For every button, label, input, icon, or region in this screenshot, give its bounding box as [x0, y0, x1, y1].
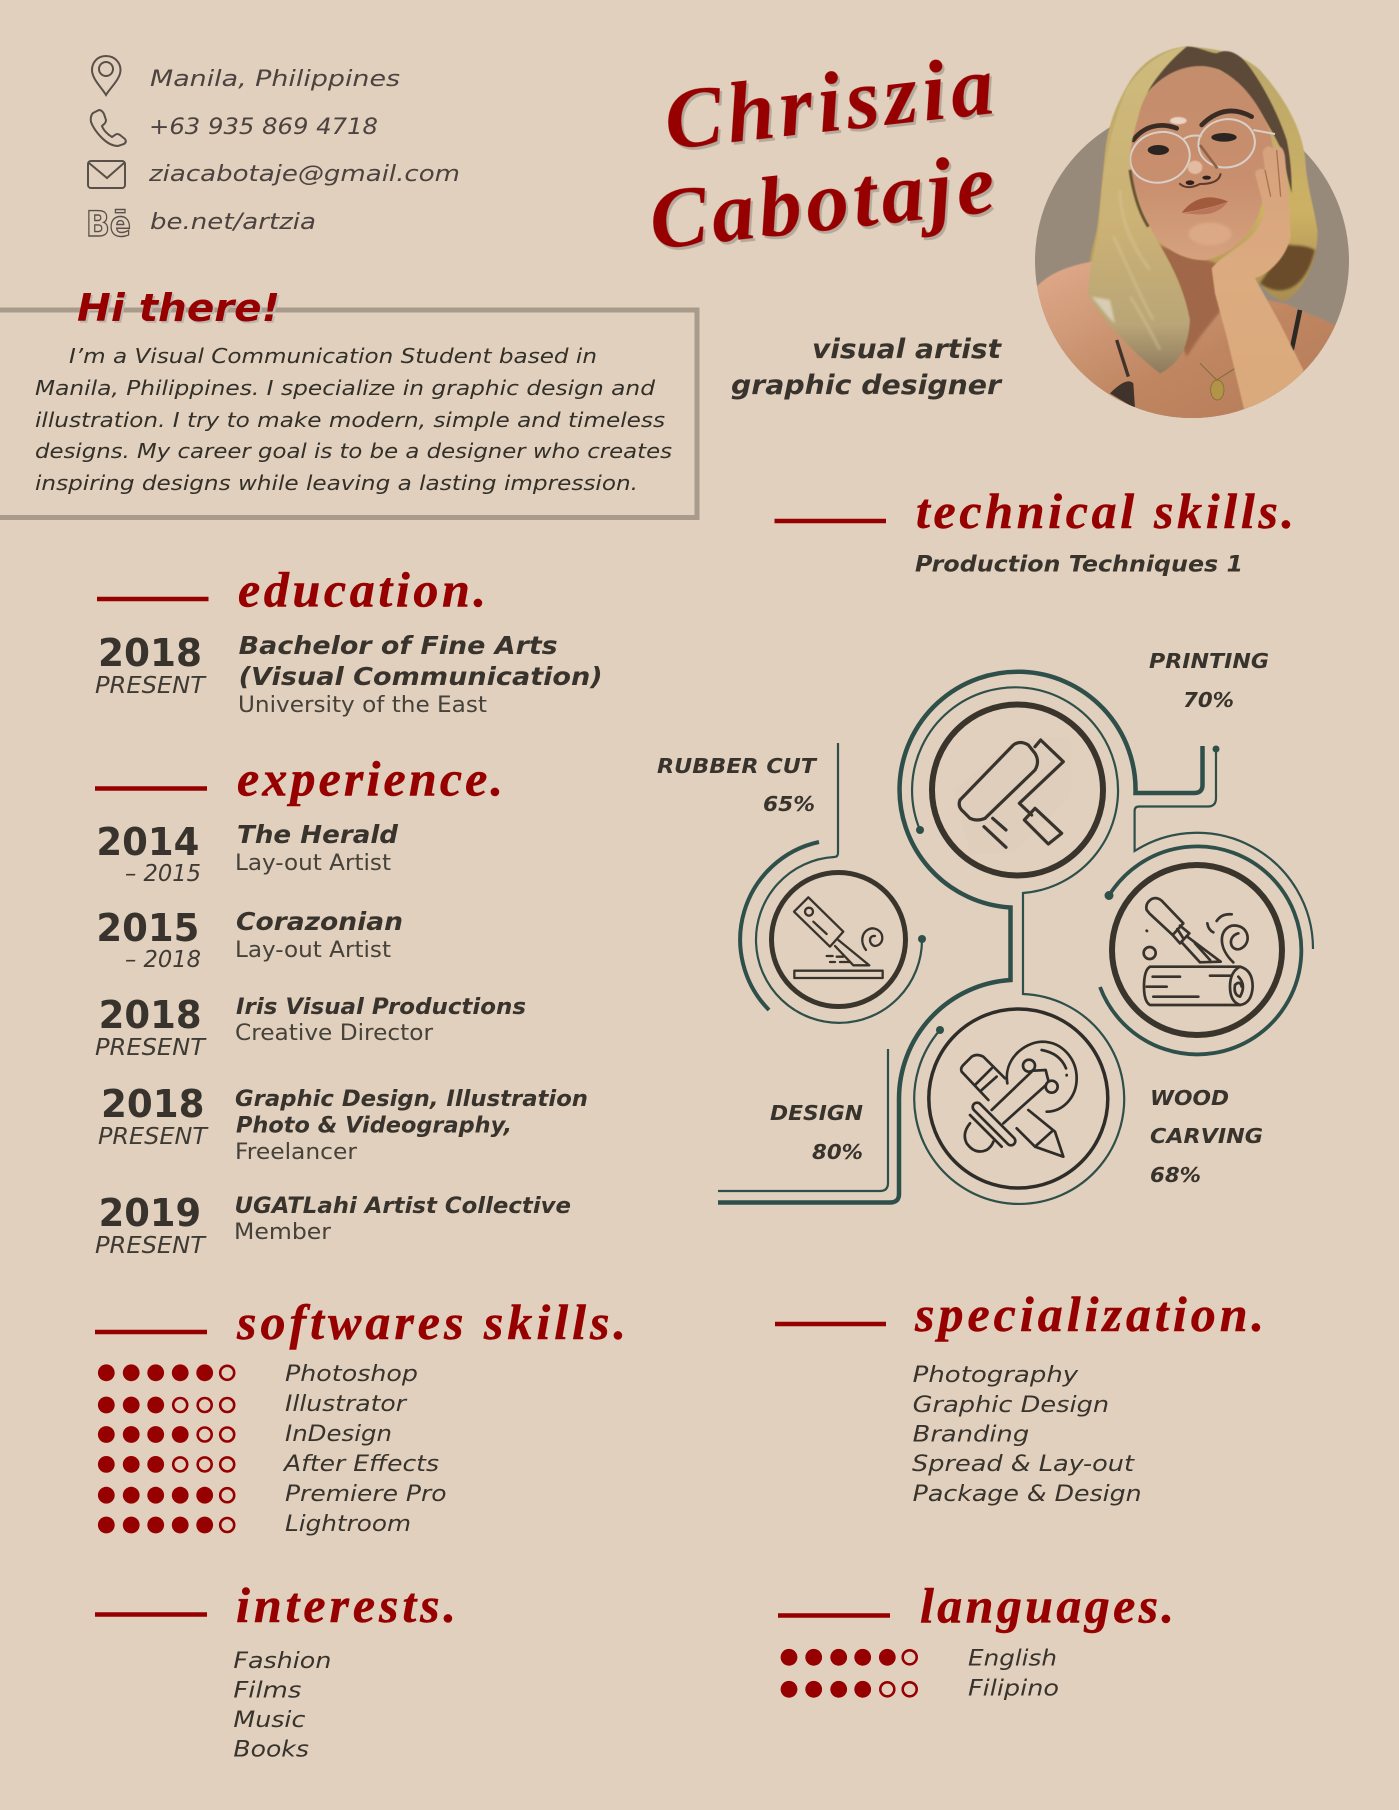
entry: The Herald: 2014 [96, 820, 199, 864]
label: printing: 70% [1183, 688, 1234, 712]
subtitle: roles: graphic designer [731, 370, 1003, 401]
connector dots [916, 746, 1220, 1034]
entry: Freelancer: Freelancer [235, 1140, 358, 1165]
software names: Lightroom [285, 1512, 411, 1537]
heading: technical skills: technical skills. [916, 483, 1294, 539]
icon: phone [91, 110, 126, 146]
icon: palette pencil and brush [961, 1042, 1077, 1157]
label: design [770, 1101, 863, 1164]
section: languages [778, 1578, 1174, 1702]
portrait [1020, 47, 1353, 430]
rule [775, 1322, 886, 1326]
language names: Filipino [968, 1676, 1059, 1702]
title: name: Chriszia [660, 36, 998, 168]
entry: Iris Visual Productions: 2018 [99, 993, 202, 1037]
entry: Freelancer [98, 1082, 588, 1165]
software names: Photoshop [285, 1362, 418, 1387]
entry: Corazonian: Corazonian [236, 907, 403, 936]
connector: wood carving thick arc [1100, 846, 1301, 1054]
panel border [0, 310, 697, 518]
rule [774, 519, 886, 523]
heading: education: education. [238, 562, 486, 618]
text: phone: +63 935 869 4718 [149, 115, 378, 140]
heading: specialization: specialization. [914, 1286, 1264, 1342]
icon: cutting knife [794, 897, 883, 978]
section: interests [95, 1577, 456, 1762]
section: technical skills [774, 483, 1294, 578]
entry: Iris Visual Productions [95, 993, 526, 1061]
icon: chisel and log [1144, 898, 1253, 1005]
about panel [0, 286, 697, 518]
specialization list: Package & Design [913, 1482, 1142, 1507]
software names: InDesign [285, 1422, 392, 1447]
entry: UGATLahi [95, 1191, 571, 1259]
software names [282, 1362, 446, 1537]
connector: rubber cut thin arc [756, 743, 922, 1023]
rule [97, 597, 208, 601]
school: University of the East [238, 693, 487, 718]
interest list: Music [233, 1708, 305, 1733]
interest list [233, 1649, 331, 1762]
degree: (Visual Communication) [239, 662, 603, 691]
entry: Corazonian: 2015 [96, 906, 199, 950]
interest list: Fashion [233, 1649, 331, 1674]
entry: Iris Visual Productions: PRESENT [95, 1035, 207, 1061]
interest list: Books [233, 1738, 309, 1762]
portrait back hair [1088, 47, 1317, 373]
ring: wood carving [1112, 865, 1282, 1035]
year end: present: PRESENT [95, 673, 207, 699]
label: rubber cut [657, 754, 818, 816]
rule [95, 1330, 207, 1334]
entry: Corazonian: – 2018 [125, 947, 201, 973]
label: design: 80% [812, 1140, 863, 1164]
label: wood carving: WOOD [1150, 1086, 1229, 1110]
label: wood carving: 68% [1150, 1163, 1201, 1187]
connector: rubber cut thick arc [740, 842, 819, 1010]
entry: Freelancer: Graphic Design, Illustration [235, 1087, 588, 1112]
ring: printing [932, 704, 1103, 876]
connector: printing and design thin line [912, 687, 1124, 1204]
specialization list: Spread & Lay-out [912, 1452, 1136, 1477]
heading: softwares skills: softwares skills. [236, 1294, 626, 1350]
about text: Manila, Philippines. I specialize in graphic design and [35, 376, 655, 400]
connector: design thin leader [718, 1049, 888, 1191]
label: design: DESIGN [770, 1101, 863, 1125]
diagram: technical skills infographic [657, 649, 1313, 1204]
software names: Premiere Pro [285, 1482, 446, 1507]
software names: Illustrator [285, 1392, 408, 1417]
specialization list: Graphic Design [913, 1393, 1109, 1418]
degree [239, 631, 603, 691]
entry: UGATLahi: PRESENT [95, 1233, 207, 1259]
entry: UGATLahi: Member [234, 1220, 332, 1245]
icon: mail [88, 161, 125, 188]
entry: UGATLahi: 2019 [99, 1191, 201, 1235]
heading: experience: experience. [237, 750, 503, 806]
entry: Freelancer: 2018 [101, 1082, 204, 1126]
subheading: Production Techniques 1 [915, 552, 1243, 578]
about text: illustration. I try to make modern, simple and timeless [35, 408, 665, 432]
heading: interests: interests. [236, 1577, 456, 1633]
label: printing: PRINTING [1149, 649, 1269, 673]
portrait body [1037, 244, 1335, 418]
language rating dots [781, 1649, 917, 1698]
connector: wood carving thin arc [1135, 749, 1313, 949]
label: rubber cut: RUBBER CUT [657, 754, 818, 778]
text: email: ziacabotaje@gmail.com [148, 162, 460, 187]
language names [968, 1646, 1059, 1702]
about text: inspiring designs while leaving a lasting impression. [35, 471, 638, 495]
subtitle: roles [731, 334, 1003, 401]
label: wood carving: CARVING [1150, 1124, 1263, 1148]
label: printing [1149, 649, 1269, 712]
subtitle: roles: visual artist [812, 334, 1002, 365]
entry: The Herald: Lay-out Artist [235, 851, 391, 876]
about text: designs. My career goal is to be a designer who creates [35, 439, 672, 463]
heading: languages: languages. [920, 1578, 1174, 1634]
software names: After Effects [282, 1452, 439, 1477]
section: specialization [775, 1286, 1264, 1507]
icon: location pin [92, 56, 120, 95]
ring: design [929, 1009, 1108, 1188]
contact block [86, 56, 460, 245]
year: 2018: 2018 [98, 631, 202, 675]
heading: Hi there: Hi there! [77, 286, 280, 330]
entry: The Herald: – 2015 [125, 861, 201, 887]
section: softwares skills [95, 1294, 626, 1537]
connector: printing and design thick line [718, 672, 1202, 1202]
entry: The Herald: The Herald [237, 820, 399, 849]
entry: Corazonian [96, 906, 403, 973]
portrait backdrop circle [1035, 104, 1349, 418]
section: experience [95, 750, 588, 1259]
about text [35, 344, 672, 495]
portrait head [1125, 47, 1292, 260]
portrait front hair [1088, 47, 1190, 373]
language names: English [968, 1646, 1057, 1672]
entry: UGATLahi: UGATLahi Artist Collective [234, 1194, 571, 1219]
portrait hand and arm [1212, 146, 1303, 420]
entry: Freelancer: PRESENT [98, 1124, 209, 1150]
title: name: Cabotaje [645, 134, 999, 268]
entry: Freelancer: Photo & Videography, [236, 1114, 512, 1138]
section: education [95, 562, 603, 718]
label: wood carving [1150, 1086, 1263, 1187]
rule [95, 786, 207, 791]
specialization list [912, 1363, 1142, 1507]
about text: I’m a Visual Communication Student based in [69, 344, 597, 368]
ring: rubber cut [772, 872, 906, 1006]
entry: The Herald [96, 820, 399, 887]
text: behance: be.net/artzia [150, 210, 316, 235]
rating dots [98, 1364, 234, 1533]
entry: Iris Visual Productions: Creative Director [235, 1021, 434, 1046]
icon: paint roller [953, 737, 1070, 853]
rule [778, 1613, 890, 1618]
text: location: Manila, Philippines [150, 67, 400, 92]
entry: Iris Visual Productions: Iris Visual Productions [236, 995, 526, 1020]
interest list: Films [233, 1678, 301, 1704]
specialization list: Photography [913, 1363, 1079, 1388]
degree: Bachelor of Fine Arts [239, 631, 558, 660]
title: name [645, 36, 999, 268]
label: rubber cut: 65% [763, 792, 815, 816]
icon: behance: Bē [86, 205, 131, 245]
entry: Corazonian: Lay-out Artist [235, 938, 391, 963]
rule [95, 1612, 207, 1617]
specialization list: Branding [913, 1422, 1029, 1448]
